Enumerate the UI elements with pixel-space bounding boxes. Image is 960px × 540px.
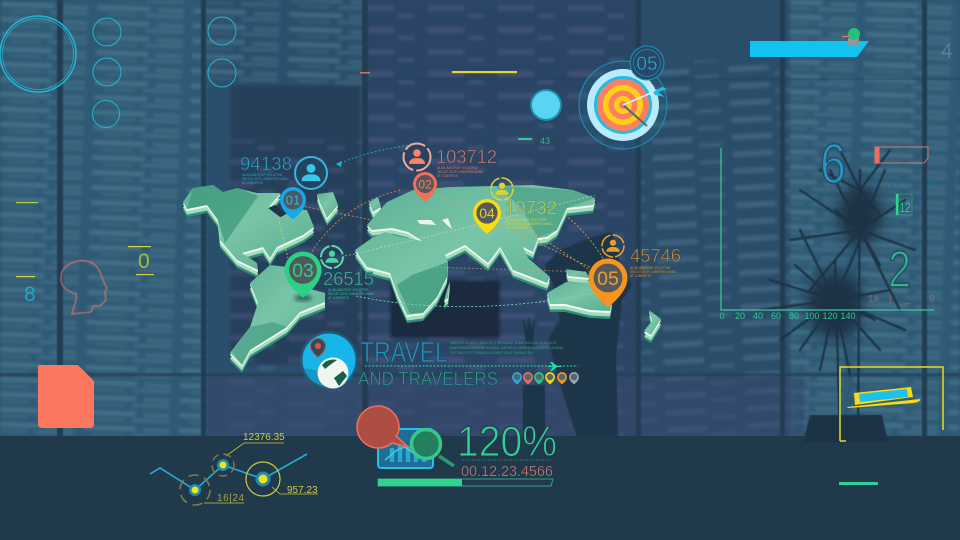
chart screen: [378, 429, 433, 468]
counter box 12: [896, 194, 912, 215]
right scattered labels: _: [905, 179, 912, 190]
stat 120%: 120%: [457, 418, 557, 466]
right scattered labels: 9: [929, 294, 935, 305]
shaded continent regions: [187, 185, 258, 243]
location 03: green pin and stat: AT LOBORTIS: [328, 296, 349, 300]
pin 02: 02: [418, 177, 432, 191]
location 02: coral pin and stat: 103712: [436, 146, 497, 167]
location 03: green pin and stat: ALIQUAM ERAT VOLUTPAT.: [328, 288, 369, 292]
callout lines: [204, 443, 318, 503]
location 05: orange pin and stat: 45746: [630, 245, 681, 266]
location 04: yellow pin and stat: 19732: [505, 197, 557, 218]
location 04: yellow pin and stat: [473, 178, 557, 234]
top-right cyan bar with marker: [750, 28, 869, 57]
silhouette: person at window: [545, 232, 632, 437]
map marker: [310, 338, 326, 357]
floor: [0, 436, 960, 540]
travel title block: TRAVEL: [360, 337, 448, 369]
hudson bay: [268, 205, 286, 217]
location 03: green pin and stat: 03: [292, 260, 314, 282]
file icon: [38, 365, 94, 428]
green dash bottom right: [839, 482, 878, 485]
axis chart: 80: [789, 311, 799, 321]
location 01: blue pin and stat: ALIQUAM ERAT VOLUTPAT.: [242, 173, 283, 177]
line chart with callouts: 957.23: [287, 485, 318, 496]
plane icon: [548, 362, 562, 371]
location 04: yellow pin and stat: SED AT ODIT LOBORTIS NUNC: [506, 222, 553, 226]
travel title block: [300, 331, 579, 389]
axis chart: 120: [822, 311, 838, 321]
world map, extruded: [183, 145, 661, 381]
right scattered labels: |: [889, 294, 892, 305]
location 01: blue pin and stat: AT LOBORTIS: [242, 181, 263, 185]
user ring 05: [602, 235, 624, 257]
axis chart: 60: [771, 311, 781, 321]
target icon with counter 05: [579, 46, 667, 149]
location 02: coral pin and stat: AT LOBORTIS: [437, 174, 458, 178]
pin 04: 04: [479, 205, 495, 221]
HUD rings: top-left circles: [0, 16, 236, 128]
small stat 43: 43: [540, 136, 550, 146]
user ring 02: [404, 144, 430, 170]
left side numerals and dashes: 8: [24, 283, 36, 306]
axis chart: 20: [735, 311, 745, 321]
travel title block: MAECENAS SAPIEN MAGNA, DAPIBUS SAPIEN SUSCIPIT LACINIA: [450, 346, 564, 350]
right scattered labels: |: [891, 179, 894, 190]
right scattered labels: [868, 179, 936, 305]
user ring 04: [491, 178, 513, 200]
location 01: blue pin and stat: 94138: [240, 153, 292, 174]
location 01: blue pin and stat: [240, 153, 327, 220]
location 02: coral pin and stat: ALIQUAM ERAT VOLUTPAT.: [437, 166, 478, 170]
coral battery gauge: [875, 147, 928, 163]
right scattered labels: 0: [930, 179, 936, 190]
progress bar: [378, 479, 553, 486]
axis chart: [719, 148, 934, 321]
axis chart: 40: [753, 311, 763, 321]
pin 05: 05: [597, 268, 619, 290]
connection routes: [278, 145, 610, 307]
silhouette: potted plant: [760, 150, 915, 442]
location 05: orange pin and stat: AT LOBORTIS: [630, 274, 651, 278]
location 01: blue pin and stat: SED AT ODIT LOBORTIS NUNC: [242, 177, 289, 181]
pin 03: [294, 295, 312, 301]
right big numeral 6: 6: [820, 132, 846, 196]
right big numeral 2: 2: [888, 241, 911, 299]
yellow dash top: [452, 71, 517, 73]
location 04: yellow pin and stat: ALIQUAM ERAT VOLUTPAT.: [506, 218, 547, 222]
cyan badge circle: [530, 89, 562, 121]
right scattered labels: _: [904, 294, 911, 305]
location 05: orange pin and stat: ALIQUAM ERAT VOLUTPAT.: [630, 266, 671, 270]
line chart with callouts: 16|24: [217, 493, 244, 504]
line chart with callouts: 12376.35: [243, 432, 285, 443]
silhouette: stool and small plant: [523, 316, 545, 437]
location 03: green pin and stat: SED AT ODIT LOBORTIS NUNC: [328, 292, 375, 296]
location 02: coral pin and stat: SED AT ODIT LOBORTIS NUNC: [437, 170, 484, 174]
location 03: green pin and stat: [284, 246, 375, 301]
magnifier: [412, 430, 454, 466]
pin legend row: [512, 372, 579, 384]
user ring 03: [321, 246, 343, 268]
line chart with callouts: [150, 432, 318, 505]
axis chart: 0: [719, 311, 725, 321]
right scattered labels: #: [873, 179, 879, 190]
inland seas: [417, 218, 452, 229]
left side numerals and dashes: 0: [138, 250, 150, 273]
location 05: orange pin and stat: SED AT ODIT LOBORTIS NUNC: [630, 270, 677, 274]
axis chart: 100: [804, 311, 820, 321]
small orange dash: [360, 72, 370, 74]
laptop frame: [840, 367, 943, 441]
digit 4 top-right: 4: [941, 40, 953, 63]
travel title block: SOCIALIS ET CONVALLIS ORCI QUIS VARIUS EU: [450, 351, 533, 355]
axis chart: 140: [840, 311, 856, 321]
travel title block: AND TRAVELERS: [358, 369, 498, 389]
counter badge: 05: [636, 54, 658, 75]
head outline icon: [61, 261, 107, 314]
counter box 12: 12: [900, 199, 911, 215]
travel title block: MAURIS EU ELIT MOLLIS, TINCIDUNT DIAM MOLLIS IN AUGUE: [450, 341, 557, 345]
stat 120%: 00.12.23.4566: [461, 464, 553, 480]
pin 01: 01: [286, 193, 300, 208]
left side numerals and dashes: [16, 202, 154, 306]
small stat 43: [518, 136, 550, 146]
right scattered labels: 1#: [868, 294, 880, 305]
location 04: yellow pin and stat: AT LOBORTIS: [506, 226, 527, 230]
location 02: coral pin and stat: [404, 144, 497, 202]
location 03: green pin and stat: 26515: [323, 268, 374, 289]
speech bubble: [357, 406, 408, 448]
search chart icon with speech bubble: [357, 406, 454, 468]
globe badge: [300, 331, 358, 389]
user ring 01: [295, 157, 327, 189]
location 05: orange pin and stat: [588, 235, 681, 307]
